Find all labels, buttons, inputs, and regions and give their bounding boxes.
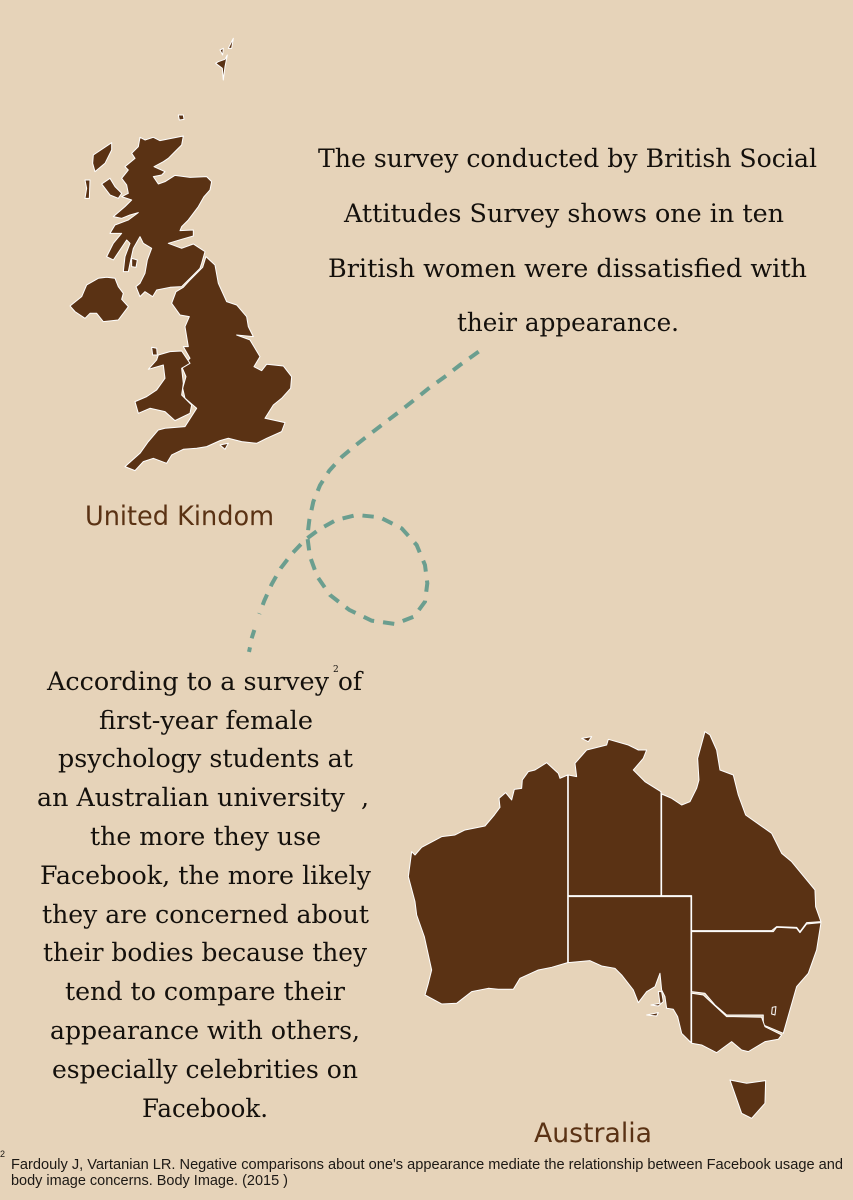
- label: Australia: Australia: [534, 1118, 652, 1149]
- text: British Social Attitudes Survey finding: The survey conducted by British Social: [318, 144, 817, 173]
- text: Australian university survey finding: Facebook.: [142, 1094, 268, 1123]
- text: Australian university survey finding: of: [338, 667, 364, 696]
- text: Australian university survey finding: an Australian university ,: [37, 783, 369, 812]
- text: Australian university survey finding: the more they use: [90, 822, 321, 851]
- text: Australian university survey finding: psychology students at: [58, 744, 353, 773]
- text: Australian university survey finding: 2: [333, 665, 339, 675]
- text: Australian university survey finding: tend to compare their: [65, 977, 345, 1006]
- map: United Kingdom: [70, 38, 292, 471]
- text: British Social Attitudes Survey finding: [318, 144, 817, 337]
- text: Australian university survey finding: [37, 665, 372, 1123]
- footnote: body image concerns. Body Image. (2015 ): [11, 1173, 288, 1189]
- text: Australian university survey finding: Facebook, the more likely: [40, 861, 372, 890]
- map: Australia: [408, 732, 821, 1118]
- label: United Kingdom: United Kindom: [85, 501, 274, 532]
- text: British Social Attitudes Survey finding: their appearance.: [457, 308, 679, 337]
- text: Australian university survey finding: they are concerned about: [42, 900, 369, 929]
- text: Australian university survey finding: first-year female: [99, 706, 313, 735]
- text: Australian university survey finding: especially celebrities on: [52, 1055, 358, 1084]
- text: Australian university survey finding: their bodies because they: [43, 938, 368, 967]
- text: Australian university survey finding: According to a survey: [46, 667, 330, 696]
- footnote: [0, 1149, 843, 1189]
- text: British Social Attitudes Survey finding: Attitudes Survey shows one in ten: [343, 199, 784, 228]
- footnote: Fardouly J, Vartanian LR. Negative comparisons about one's appearance mediate the relationship between Facebook usage and: [11, 1157, 843, 1173]
- text: British Social Attitudes Survey finding: British women were dissatisfied with: [328, 254, 807, 283]
- text: Australian university survey finding: appearance with others,: [50, 1016, 360, 1045]
- footnote: 2: [0, 1149, 5, 1159]
- arrow: dashed looping path: [249, 352, 479, 652]
